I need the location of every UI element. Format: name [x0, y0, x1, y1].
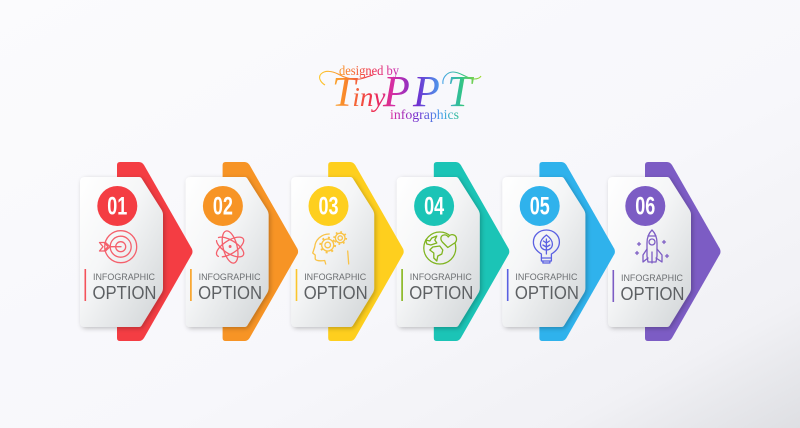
arrow: red — [117, 162, 192, 341]
number badge 01 — [97, 186, 137, 226]
number badge 04: 04 — [424, 192, 444, 220]
label: INFOGRAPHIC — [93, 272, 155, 283]
logo letter: T: T — [447, 67, 475, 116]
icon: target with arrow — [100, 231, 137, 263]
number badge 02: 02 — [213, 192, 233, 220]
card — [397, 177, 480, 327]
accent bar — [296, 269, 297, 301]
logo letter: P: P — [382, 67, 410, 116]
card — [291, 177, 374, 327]
arrow: purple — [645, 162, 720, 341]
option 04 — [397, 162, 509, 341]
icon: light bulb with leaf — [533, 230, 559, 263]
arrow: teal — [434, 162, 509, 341]
number badge 01: 01 — [107, 192, 127, 220]
logo: designed by Tiny PPT infographics — [320, 64, 481, 123]
label: OPTION — [515, 283, 579, 303]
label: OPTION — [304, 283, 368, 303]
label: OPTION — [198, 283, 262, 303]
label: INFOGRAPHIC — [410, 272, 472, 283]
number badge 03 — [308, 186, 348, 226]
label: INFOGRAPHIC — [199, 272, 261, 283]
logo swirl strokes — [320, 71, 481, 85]
arrow: blue — [539, 162, 615, 341]
arrow: yellow — [328, 162, 404, 341]
number badge 03: 03 — [318, 192, 339, 220]
label — [515, 272, 579, 303]
accent bar — [401, 269, 403, 301]
label — [409, 272, 473, 303]
arrow: orange — [223, 162, 298, 341]
accent bar — [612, 270, 614, 302]
icon: globe with heart — [424, 232, 456, 264]
accent bar — [507, 269, 508, 301]
icon: atom — [214, 229, 247, 265]
card — [186, 177, 269, 327]
option 06 — [608, 162, 720, 341]
icon: head with gears — [313, 232, 349, 264]
number badge 06 — [625, 186, 665, 226]
logo word: Tiny: Tiny — [332, 70, 385, 116]
label — [198, 272, 262, 303]
number badge 05: 05 — [530, 192, 550, 220]
card — [608, 177, 691, 327]
label — [304, 272, 368, 303]
accent bar — [190, 269, 192, 301]
number badge 02 — [203, 186, 243, 226]
number badge 05 — [520, 186, 560, 226]
label: INFOGRAPHIC — [515, 272, 578, 283]
logo line: infographics: infographics — [390, 108, 459, 123]
number badge 06: 06 — [635, 192, 655, 220]
label: OPTION — [409, 283, 473, 303]
card — [502, 177, 585, 327]
option 03 — [291, 162, 404, 341]
card — [80, 177, 163, 327]
icon: rocket with sparkles — [636, 230, 668, 263]
label — [92, 272, 156, 303]
label: INFOGRAPHIC — [621, 273, 683, 284]
label: OPTION — [620, 284, 684, 304]
logo letter: P: P — [412, 67, 440, 116]
logo line: designed by: designed by — [339, 64, 399, 79]
option 01 — [80, 162, 192, 341]
option 02 — [186, 162, 298, 341]
option 05 — [502, 162, 615, 341]
accent bar — [84, 269, 86, 301]
label — [620, 273, 684, 304]
label: OPTION — [92, 283, 156, 303]
number badge 04 — [414, 186, 454, 226]
label: INFOGRAPHIC — [304, 272, 366, 283]
